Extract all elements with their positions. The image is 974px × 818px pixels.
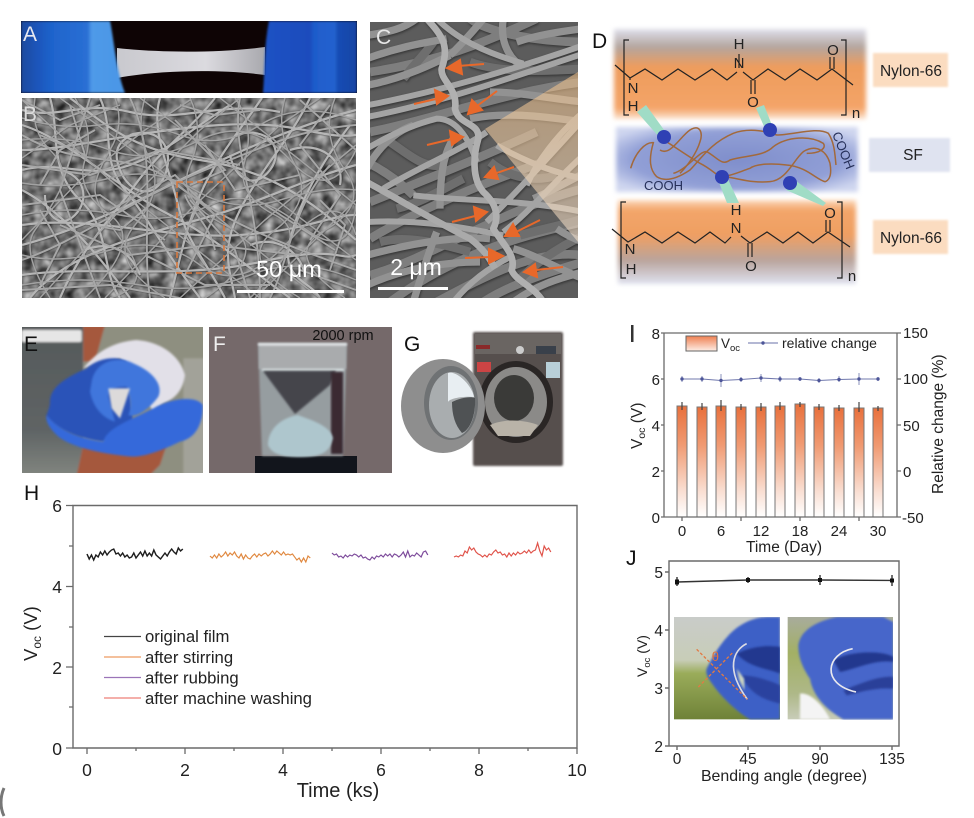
band: bottom nylon xyxy=(618,200,856,284)
panel C: magnified SEM xyxy=(367,19,583,302)
chain atom labels: N xyxy=(734,55,744,72)
x tick labels: 18 xyxy=(792,523,808,540)
panel B: SEM fibres xyxy=(22,98,356,298)
photo: bent film curved xyxy=(788,617,893,719)
orange arrows xyxy=(414,60,563,277)
y tick labels xyxy=(654,565,663,756)
y axis title: (V) xyxy=(20,606,41,636)
stirrer base xyxy=(255,456,357,473)
washer body xyxy=(473,332,563,466)
chain atom labels: n xyxy=(852,105,860,122)
trace: original film xyxy=(87,548,183,560)
dashed selection box xyxy=(177,182,224,273)
dark reflection xyxy=(331,372,343,454)
label boxes: Nylon-66 xyxy=(880,230,942,247)
fingers xyxy=(47,358,133,442)
data line xyxy=(675,575,894,586)
y tick labels: 4 xyxy=(52,577,62,597)
y tick labels: 5 xyxy=(654,565,663,582)
film in fist xyxy=(108,388,130,418)
fabric film xyxy=(268,415,333,457)
chart I: Voc over time xyxy=(629,325,947,556)
axis titles: (V) xyxy=(634,635,650,658)
chain atom labels: n xyxy=(848,268,856,285)
speed text: 2000 rpm xyxy=(312,328,374,344)
axis titles: Bending angle (degree) xyxy=(701,768,867,785)
trace: after rubbing xyxy=(332,551,428,560)
stray cropped arc xyxy=(1,788,4,816)
backdrop xyxy=(20,325,207,475)
legend: oc xyxy=(730,343,740,354)
band: silk fibroin xyxy=(616,127,858,192)
label G: G xyxy=(404,333,420,356)
relative change line xyxy=(680,373,880,387)
COOH groups: COOH xyxy=(644,178,683,193)
chain atom labels: O xyxy=(747,94,759,111)
y tick labels: 2 xyxy=(52,658,62,678)
x tick labels: 2 xyxy=(180,760,190,780)
chain atom labels: H xyxy=(731,202,741,219)
label F: F xyxy=(213,333,226,356)
right tick labels: 150 xyxy=(903,325,928,342)
panel E: crumpling photo xyxy=(20,325,207,475)
label A: A xyxy=(23,23,37,46)
left tick labels: 6 xyxy=(652,372,660,389)
chain atom labels: O xyxy=(745,258,757,275)
label J: J xyxy=(626,547,636,570)
photo: bent film with angle: θ xyxy=(712,649,719,664)
right tick labels xyxy=(902,325,928,527)
sleeve xyxy=(83,340,185,412)
vortex xyxy=(263,371,336,414)
right tick labels: 0 xyxy=(903,464,911,481)
x tick labels: 12 xyxy=(753,523,769,540)
legend: after stirring xyxy=(145,648,233,667)
chain atom labels: N xyxy=(625,241,635,258)
chart J: Voc vs bending angle xyxy=(634,561,905,785)
chain atom labels: H xyxy=(626,261,636,278)
left tick labels: 0 xyxy=(652,510,660,527)
x tick labels xyxy=(673,751,905,768)
plot frame xyxy=(73,506,577,748)
axis titles: V xyxy=(634,668,650,677)
trace: after machine washing xyxy=(454,543,551,557)
y axis title: oc xyxy=(30,636,44,649)
label H: H xyxy=(24,482,39,505)
left tick labels: 4 xyxy=(652,418,660,435)
COOH groups xyxy=(644,130,858,193)
chain atom labels: H xyxy=(734,36,744,53)
drum xyxy=(479,361,553,443)
x tick labels: 0 xyxy=(673,751,682,768)
chain atom labels xyxy=(625,36,860,285)
left tick labels: 2 xyxy=(652,464,660,481)
hydrogen bond wedges xyxy=(637,105,826,206)
chain atom labels: N xyxy=(628,80,638,97)
panel G: washing machine xyxy=(401,332,563,466)
beaker xyxy=(258,343,347,456)
foreground wavy fibre xyxy=(427,19,543,302)
x tick labels: 0 xyxy=(82,760,92,780)
right tick labels: -50 xyxy=(902,510,924,527)
left tick labels: 8 xyxy=(652,326,660,343)
orange highlight wedge xyxy=(485,72,578,242)
plot frame and ticks xyxy=(665,561,899,750)
axis titles xyxy=(634,635,867,785)
legend: relative change xyxy=(782,335,877,351)
axis titles: V xyxy=(629,439,646,449)
chain atom labels: O xyxy=(827,42,839,59)
right glove xyxy=(263,21,357,93)
photo: bent film with angle xyxy=(674,617,780,719)
control panel xyxy=(475,334,561,378)
x tick labels xyxy=(82,760,587,780)
chain atom labels: O xyxy=(824,205,836,222)
y tick labels: 0 xyxy=(52,739,62,759)
binding dots xyxy=(657,123,797,190)
fibre network xyxy=(22,98,356,298)
left glove xyxy=(21,21,125,93)
x axis title: Time (ks) xyxy=(297,780,379,802)
axis titles xyxy=(629,354,947,556)
panel F: stirring beaker xyxy=(209,327,392,473)
y tick labels: 2 xyxy=(654,739,663,756)
chart H: Voc stability xyxy=(20,496,587,802)
right tick labels: 100 xyxy=(903,371,928,388)
legend: after rubbing xyxy=(145,668,239,688)
axis titles: Relative change (%) xyxy=(930,354,947,494)
label boxes xyxy=(869,53,950,254)
x tick labels: 30 xyxy=(870,523,886,540)
y tick labels: 3 xyxy=(654,681,663,698)
band: top nylon xyxy=(614,29,866,119)
silk chains xyxy=(631,128,836,182)
scale bar 2 um: 2 μm xyxy=(390,254,442,280)
scale bar 2 um xyxy=(378,259,448,290)
axis titles: oc xyxy=(636,428,648,439)
axis ticks xyxy=(66,506,577,754)
chain atom labels: H xyxy=(628,98,638,115)
x tick labels xyxy=(678,523,886,540)
x tick labels: 10 xyxy=(567,760,587,780)
upper glass xyxy=(258,343,347,371)
y tick labels: 4 xyxy=(654,623,663,640)
axis titles: (V) xyxy=(629,403,646,428)
label B: B xyxy=(23,103,37,126)
chain atom labels: N xyxy=(731,220,741,237)
x tick labels: 6 xyxy=(717,523,725,540)
panel D: molecular schematic xyxy=(612,29,950,285)
label D: D xyxy=(592,30,607,53)
x tick labels: 135 xyxy=(879,751,905,768)
x tick labels: 45 xyxy=(739,751,757,768)
label I xyxy=(631,325,634,342)
bars xyxy=(677,404,883,517)
film strip xyxy=(117,47,265,78)
door xyxy=(401,359,485,453)
x tick labels: 90 xyxy=(811,751,829,768)
x tick labels: 6 xyxy=(376,760,386,780)
background fibres xyxy=(367,19,583,302)
y tick labels xyxy=(52,496,62,759)
x tick labels: 0 xyxy=(678,523,686,540)
left tick labels xyxy=(652,326,660,527)
y axis title: V xyxy=(20,649,41,661)
bar error bars xyxy=(682,400,878,412)
legend xyxy=(104,627,312,708)
axis titles: oc xyxy=(642,657,653,668)
COOH groups: COOH xyxy=(829,130,858,171)
legend xyxy=(686,335,877,354)
scale bar 50 um xyxy=(237,261,344,293)
scale bar 50 um: 50 μm xyxy=(256,256,322,282)
label E: E xyxy=(24,333,38,356)
x tick labels: 4 xyxy=(278,760,288,780)
x tick labels: 8 xyxy=(474,760,484,780)
x tick labels: 24 xyxy=(831,523,847,540)
y tick labels: 6 xyxy=(52,496,62,516)
legend: original film xyxy=(145,627,229,646)
right tick labels: 50 xyxy=(903,418,920,435)
plot frame and ticks xyxy=(661,333,901,521)
panel A: stretched film photo xyxy=(21,21,357,93)
top chain xyxy=(612,40,853,278)
label boxes: SF xyxy=(903,147,923,164)
legend: V xyxy=(721,336,730,351)
trace: after stirring xyxy=(210,551,310,562)
label boxes: Nylon-66 xyxy=(880,63,942,80)
thumb xyxy=(90,360,160,422)
legend: after machine washing xyxy=(145,689,312,708)
lower hand xyxy=(46,399,203,457)
label C: C xyxy=(376,26,391,49)
axis titles: Time (Day) xyxy=(746,539,822,556)
